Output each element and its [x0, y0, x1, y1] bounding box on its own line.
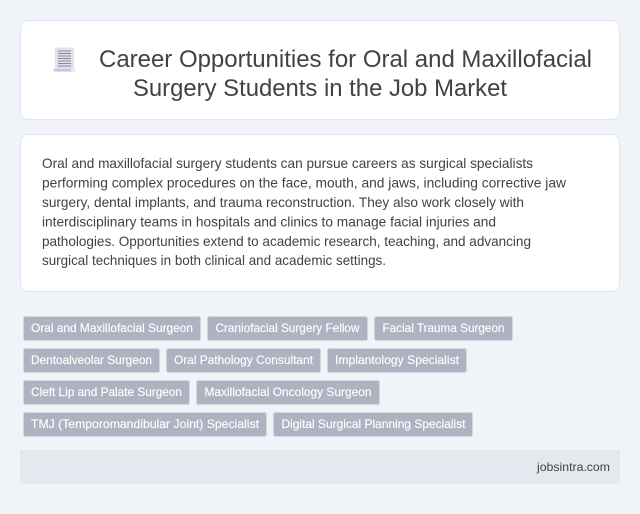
tag: Facial Trauma Surgeon — [374, 316, 512, 340]
text block: description: interdisciplinary teams in hospitals and clinics to manage facial injuries and — [42, 214, 496, 230]
text block: description — [42, 155, 567, 268]
panel: header — [20, 20, 620, 120]
footer text: jobsintra.com — [536, 460, 610, 474]
tag: Cleft Lip and Palate Surgeon: Cleft Lip and Palate Surgeon — [31, 385, 182, 399]
tag: Implantology Specialist: Implantology Specialist — [335, 353, 460, 367]
tag: Digital Surgical Planning Specialist — [274, 412, 472, 436]
icon: document scroll — [53, 47, 75, 72]
tag: Cleft Lip and Palate Surgeon — [24, 380, 190, 404]
tag: Oral and Maxillofacial Surgeon: Oral and Maxillofacial Surgeon — [31, 321, 193, 335]
tag: Craniofacial Surgery Fellow — [208, 316, 368, 340]
tag list: career roles — [24, 316, 512, 436]
tag: Maxillofacial Oncology Surgeon: Maxillofacial Oncology Surgeon — [204, 385, 372, 399]
tag: TMJ Specialist: TMJ (Temporomandibular Joint) Specialist — [31, 417, 260, 431]
text block: description: pathologies. Opportunities extend to academic research, teaching, and advancing — [42, 233, 531, 249]
title: Surgery Students in the Job Market — [133, 75, 507, 102]
text block: description: surgery, dental implants, and trauma reconstruction. They also work closely with — [42, 194, 524, 210]
title — [99, 46, 592, 102]
tag: Dentoalveolar Surgeon: Dentoalveolar Surgeon — [31, 353, 152, 367]
title: Career Opportunities for Oral and Maxillofacial — [99, 46, 592, 73]
text block: description: performing complex procedures on the face, mouth, and jaws, including corrective jaw — [42, 174, 567, 190]
text block: description: surgical techniques in both clinical and academic settings. — [42, 252, 386, 268]
panel: description — [20, 134, 620, 292]
tag: Craniofacial Surgery Fellow: Craniofacial Surgery Fellow — [216, 321, 360, 335]
tag: Oral Pathology Consultant — [166, 348, 320, 372]
text block: description: Oral and maxillofacial surgery students can pursue careers as surgical specialists — [42, 155, 533, 171]
tag: Implantology Specialist — [328, 348, 466, 372]
tag: Dentoalveolar Surgeon — [24, 348, 160, 372]
tag: TMJ Specialist — [24, 412, 266, 436]
footer bar — [20, 450, 620, 484]
tag: Facial Trauma Surgeon: Facial Trauma Surgeon — [382, 321, 504, 335]
tag: Oral and Maxillofacial Surgeon — [24, 316, 200, 340]
tag: Digital Surgical Planning Specialist: Digital Surgical Planning Specialist — [282, 417, 466, 431]
tag: Maxillofacial Oncology Surgeon — [196, 380, 380, 404]
tag: Oral Pathology Consultant: Oral Pathology Consultant — [174, 353, 314, 367]
